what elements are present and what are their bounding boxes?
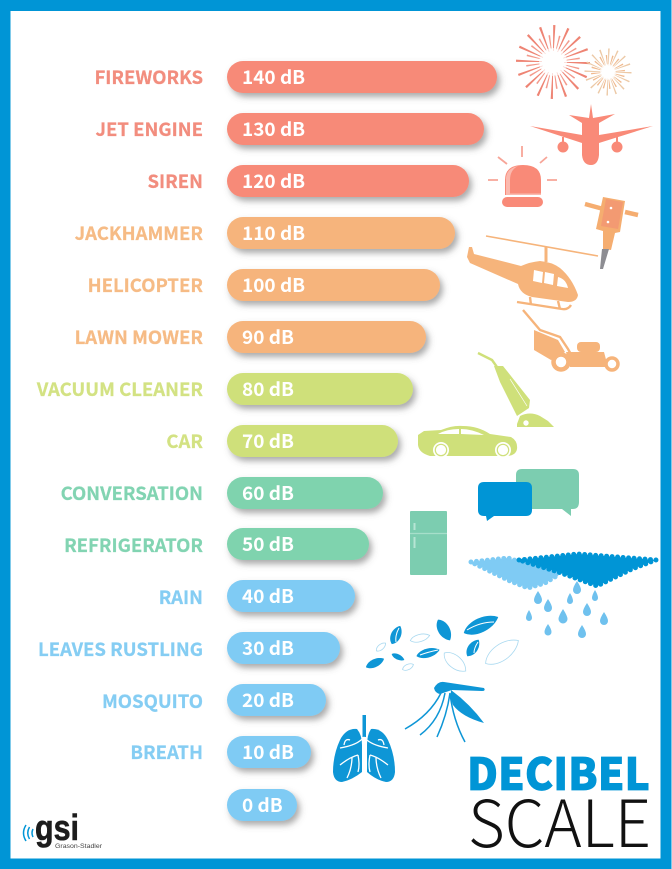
icon: helicopter — [467, 236, 598, 309]
row: mosquito — [102, 684, 326, 716]
row: helicopter — [88, 269, 440, 301]
row: conversation: CONVERSATION — [61, 480, 203, 506]
row: breath — [130, 736, 311, 768]
title: scale: SCALE — [468, 772, 651, 866]
row: jackhammer: JACKHAMMER — [75, 220, 203, 246]
row: jet engine — [96, 113, 484, 145]
row: rain: 40 dB — [242, 582, 294, 609]
logo: gsi: gsi — [35, 807, 79, 848]
row: breath: BREATH — [130, 739, 203, 765]
icon: siren — [488, 146, 557, 207]
row: leaves rustling — [38, 632, 340, 664]
icon: leaves — [364, 610, 523, 676]
icon: lawn mower — [523, 310, 618, 370]
row: car: 70 dB — [242, 427, 294, 454]
icon: rain clouds — [471, 554, 656, 638]
row: jackhammer — [75, 217, 455, 249]
icon: jet plane — [530, 104, 653, 165]
row: siren: SIREN — [147, 168, 203, 194]
icon: vacuum cleaner — [478, 353, 554, 427]
row: jet engine: 130 dB — [242, 115, 305, 142]
row: fireworks: 140 dB — [242, 63, 305, 90]
logo: gsi — [24, 807, 102, 850]
row: car: CAR — [166, 428, 203, 454]
row: fireworks: FIREWORKS — [94, 64, 203, 90]
icon: fireworks — [529, 38, 623, 87]
title: decibel: DECIBEL — [467, 739, 650, 803]
row: siren: 120 dB — [242, 167, 305, 194]
row: vacuum cleaner: VACUUM CLEANER — [36, 376, 203, 402]
icon: car — [418, 426, 517, 458]
icon: mosquito — [405, 682, 485, 742]
icon: jackhammer — [585, 197, 638, 269]
row: conversation: 60 dB — [242, 479, 294, 506]
row: mosquito: 20 dB — [242, 686, 294, 713]
row: leaves rustling: 30 dB — [242, 634, 294, 661]
row: helicopter: HELICOPTER — [88, 272, 203, 298]
row: rain — [159, 580, 355, 612]
icon: lungs — [333, 715, 395, 782]
logo: gsi: Grason-Stadler — [55, 844, 102, 850]
row: vacuum cleaner: 80 dB — [242, 375, 294, 402]
icon: refrigerator — [410, 511, 447, 575]
row: mosquito: MOSQUITO — [102, 688, 203, 714]
row: leaves rustling: LEAVES RUSTLING — [38, 636, 203, 662]
row: lawn mower: LAWN MOWER — [75, 324, 203, 350]
row: refrigerator: 50 dB — [242, 530, 294, 557]
row: jet engine: JET ENGINE — [96, 116, 203, 142]
row: vacuum cleaner — [36, 373, 413, 405]
row: refrigerator — [64, 528, 369, 560]
row: car — [166, 425, 398, 457]
row: jackhammer: 110 dB — [242, 219, 305, 246]
row: lawn mower: 90 dB — [242, 323, 294, 350]
row: fireworks — [94, 61, 497, 93]
row: conversation — [61, 477, 383, 509]
row: lawn mower — [75, 321, 426, 353]
row: rain: RAIN — [159, 584, 203, 610]
row: siren — [147, 165, 469, 197]
row: 0 dB: 0 dB — [242, 791, 283, 818]
row: 0 dB — [227, 789, 297, 821]
icon: speech bubbles — [478, 469, 579, 521]
row: refrigerator: REFRIGERATOR — [64, 532, 203, 558]
row: breath: 10 dB — [242, 738, 294, 765]
row: helicopter: 100 dB — [242, 271, 305, 298]
